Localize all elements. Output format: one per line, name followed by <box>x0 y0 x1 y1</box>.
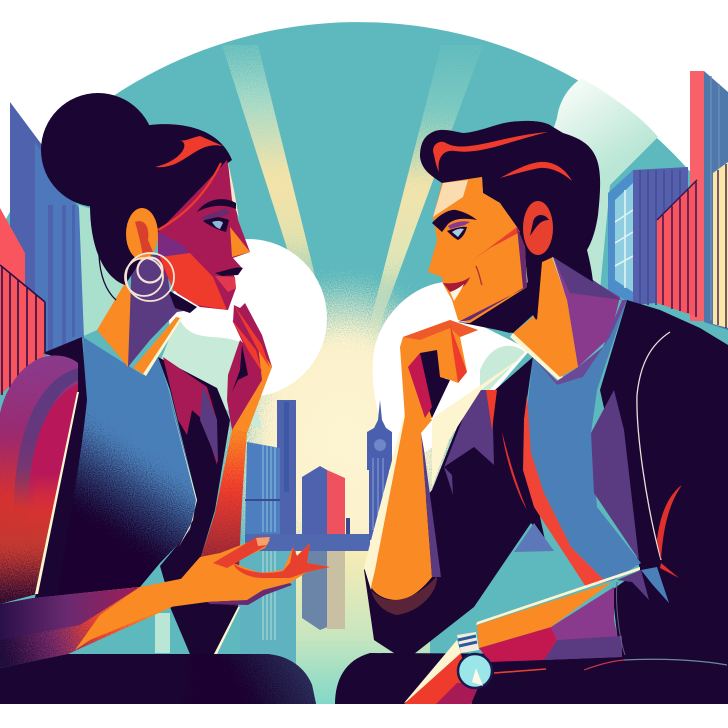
man jacket right <box>600 300 728 662</box>
man raised arm <box>364 395 441 615</box>
man lap <box>335 653 728 704</box>
light beam left <box>222 45 316 277</box>
cloud white right <box>373 282 530 470</box>
man left lapel <box>432 353 528 495</box>
woman left sleeve <box>0 356 78 604</box>
man shirt blue <box>527 300 641 582</box>
city reflection in water <box>155 551 345 661</box>
buildings left <box>0 102 84 395</box>
man ear <box>523 201 553 255</box>
wristwatch <box>457 632 492 688</box>
woman stray hair <box>99 255 116 300</box>
woman hair line <box>158 163 221 230</box>
man jacket red accents <box>502 432 682 578</box>
woman raised hand <box>227 303 272 433</box>
woman open hand <box>75 537 330 650</box>
man <box>335 121 728 704</box>
woman face <box>158 160 250 310</box>
woman ear <box>126 208 158 260</box>
woman lap <box>0 654 316 704</box>
man lap highlights <box>494 582 727 673</box>
woman brow and eye <box>197 199 236 212</box>
buildings right <box>608 71 728 330</box>
light beam right <box>368 45 482 335</box>
cloud mint left <box>79 205 125 338</box>
woman raised arm <box>183 430 247 654</box>
cloud white left <box>160 239 327 430</box>
man face <box>428 177 527 323</box>
man jacket left <box>364 357 545 655</box>
man jacket seam <box>637 332 670 560</box>
woman hair streak <box>155 136 223 167</box>
woman dark skirt below hand <box>170 600 238 654</box>
woman mouth <box>215 268 243 276</box>
man cuff spikes <box>617 567 669 603</box>
clock tower <box>367 400 392 540</box>
man hair streaks <box>433 132 572 181</box>
lap grain edge <box>222 654 316 704</box>
man thinking hand <box>400 320 478 418</box>
man brow and eye <box>432 210 477 232</box>
woman hair bun <box>41 93 155 207</box>
man hair <box>420 121 600 333</box>
man neck <box>513 257 578 377</box>
man background bar in gap <box>514 523 554 552</box>
sleeve highlight <box>35 392 79 594</box>
woman shoulder dark <box>35 337 87 598</box>
woman forearm <box>0 578 182 668</box>
man red strip <box>523 395 606 587</box>
man hand on knee <box>404 640 480 704</box>
woman dress body <box>35 338 196 598</box>
man mouth <box>443 277 470 292</box>
cloud mint upper right <box>526 78 658 290</box>
man lower arm <box>476 567 640 662</box>
woman right shoulder <box>158 357 230 607</box>
man beard shadow <box>458 255 542 333</box>
woman <box>0 93 330 704</box>
man shirt inner purple <box>591 390 639 560</box>
woman hair <box>90 124 232 285</box>
man collar <box>510 257 627 385</box>
woman neck <box>97 255 197 376</box>
woman earring <box>125 253 174 301</box>
city skyline centre <box>245 400 392 551</box>
